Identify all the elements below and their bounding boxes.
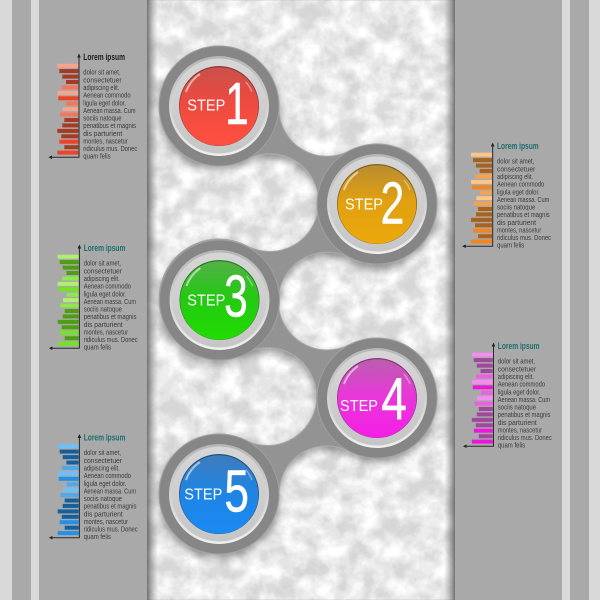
text block: dolor sit amet, [84, 450, 121, 457]
chart axes with arrows [51, 57, 79, 157]
panel: step 4 chart and text [463, 341, 552, 450]
text block: quam felis [83, 154, 111, 161]
text block: quam felis [498, 443, 526, 450]
step 3 button [160, 240, 280, 360]
bar chart [57, 64, 78, 155]
text block: Aenean massa. Cum [83, 108, 136, 115]
chart axes with arrows [466, 346, 494, 446]
text block: Aenean massa. Cum [498, 397, 550, 404]
text block [84, 450, 138, 541]
bar chart [471, 153, 492, 244]
text block: penatibus et magnis [83, 123, 136, 130]
text block: adipiscing elit. [498, 374, 534, 381]
text block: consectetuer [83, 77, 122, 84]
text block: penatibus et magnis [498, 412, 551, 419]
panel: step 5 chart and text [49, 432, 138, 541]
text block: montes, nascetur [498, 428, 543, 434]
text block: consectetuer [84, 458, 123, 465]
text block: consectetuer [498, 366, 537, 373]
textured centre panel [147, 0, 455, 600]
text block: adipiscing elit. [497, 174, 533, 181]
chart axes with arrows [465, 146, 493, 246]
text block: adipiscing elit. [84, 466, 120, 472]
text block: penatibus et magnis [497, 212, 550, 219]
step 4 button: 4 [381, 367, 407, 433]
text block: dis parturient [498, 420, 537, 427]
text block: consectetuer [84, 268, 123, 275]
text block: dolor sit amet, [497, 159, 534, 166]
text block: sociis natoque [497, 204, 535, 212]
text block: Aenean commodo [498, 382, 545, 389]
bar chart [472, 353, 493, 444]
text block: quam felis [84, 345, 111, 352]
text block: dolor sit amet, [83, 70, 121, 77]
text block: montes, nascetur [497, 228, 542, 234]
text block: adipiscing elit. [84, 276, 120, 283]
step 4 button [317, 338, 437, 458]
text block: montes, nascetur [84, 330, 129, 336]
text block: dis parturient [497, 220, 536, 227]
text block: ridiculus mus. Donec [497, 235, 551, 242]
heading: Lorem ipsum [498, 341, 540, 351]
text block: sociis natoque [84, 496, 122, 503]
step 5 button: STEP [184, 486, 222, 504]
text block: ligula eget dolor. [497, 189, 540, 196]
step 3 button: STEP [187, 292, 225, 310]
text block: montes, nascetur [84, 519, 129, 526]
heading: Lorem ipsum [83, 52, 125, 62]
text block: Aenean massa. Cum [84, 299, 136, 306]
heading: Lorem ipsum [84, 432, 126, 442]
text block: adipiscing elit. [83, 85, 119, 92]
text block: consectetuer [497, 166, 536, 173]
step 1 button: 1 [225, 70, 249, 137]
text block: dis parturient [84, 322, 123, 329]
step 1 button [159, 46, 279, 166]
bar chart [58, 444, 79, 535]
heading: Lorem ipsum [84, 243, 126, 253]
text block: sociis natoque [84, 306, 122, 314]
text block [83, 70, 138, 161]
text block: Aenean commodo [84, 473, 131, 480]
text block: Aenean massa. Cum [84, 488, 136, 495]
text block: Aenean massa. Cum [497, 197, 549, 204]
step 2 button [317, 144, 437, 264]
text block: penatibus et magnis [84, 314, 137, 321]
text block: montes, nascetur [83, 138, 128, 146]
chart axes with arrows [51, 248, 79, 348]
step 4 button: STEP [340, 398, 378, 415]
bar chart [58, 255, 79, 346]
text block: quam felis [497, 243, 525, 250]
text block: ridiculus mus. Donec [84, 527, 138, 534]
chart axes with arrows [51, 438, 79, 538]
text block [84, 261, 138, 352]
text block: Aenean commodo [83, 93, 131, 100]
panel: step 3 chart and text [49, 243, 138, 352]
step 1 button: STEP [187, 98, 225, 114]
panel: step 1 chart and text [48, 52, 138, 161]
text block: dolor sit amet, [498, 359, 535, 366]
text block: dolor sit amet, [84, 261, 121, 268]
text block: ligula eget dolor. [83, 100, 126, 107]
text block: ridiculus mus. Donec [498, 435, 552, 442]
step 3 button: 3 [224, 263, 248, 329]
text block: ligula eget dolor. [84, 481, 126, 488]
text block: Aenean commodo [84, 284, 131, 291]
step 5 button [159, 434, 279, 554]
step 2 button: 2 [381, 170, 404, 236]
step 5 button: 5 [224, 460, 249, 525]
text block: dis parturient [83, 131, 122, 138]
step 2 button: STEP [345, 196, 383, 214]
text block [497, 159, 551, 250]
text block: Aenean commodo [497, 182, 544, 189]
heading: Lorem ipsum [497, 141, 539, 151]
text block [498, 359, 552, 450]
text block: ligula eget dolor. [84, 291, 126, 298]
connector shape linking the five steps [159, 46, 437, 554]
text block: quam felis [84, 534, 111, 541]
text block: ridiculus mus. Donec [84, 337, 138, 344]
text block: ligula eget dolor. [498, 389, 541, 396]
text block: sociis natoque [83, 116, 122, 122]
text block: penatibus et magnis [84, 504, 137, 511]
text block: ridiculus mus. Donec [83, 146, 138, 153]
text block: sociis natoque [498, 404, 536, 412]
text block: dis parturient [84, 511, 123, 518]
panel: step 2 chart and text [462, 141, 551, 250]
